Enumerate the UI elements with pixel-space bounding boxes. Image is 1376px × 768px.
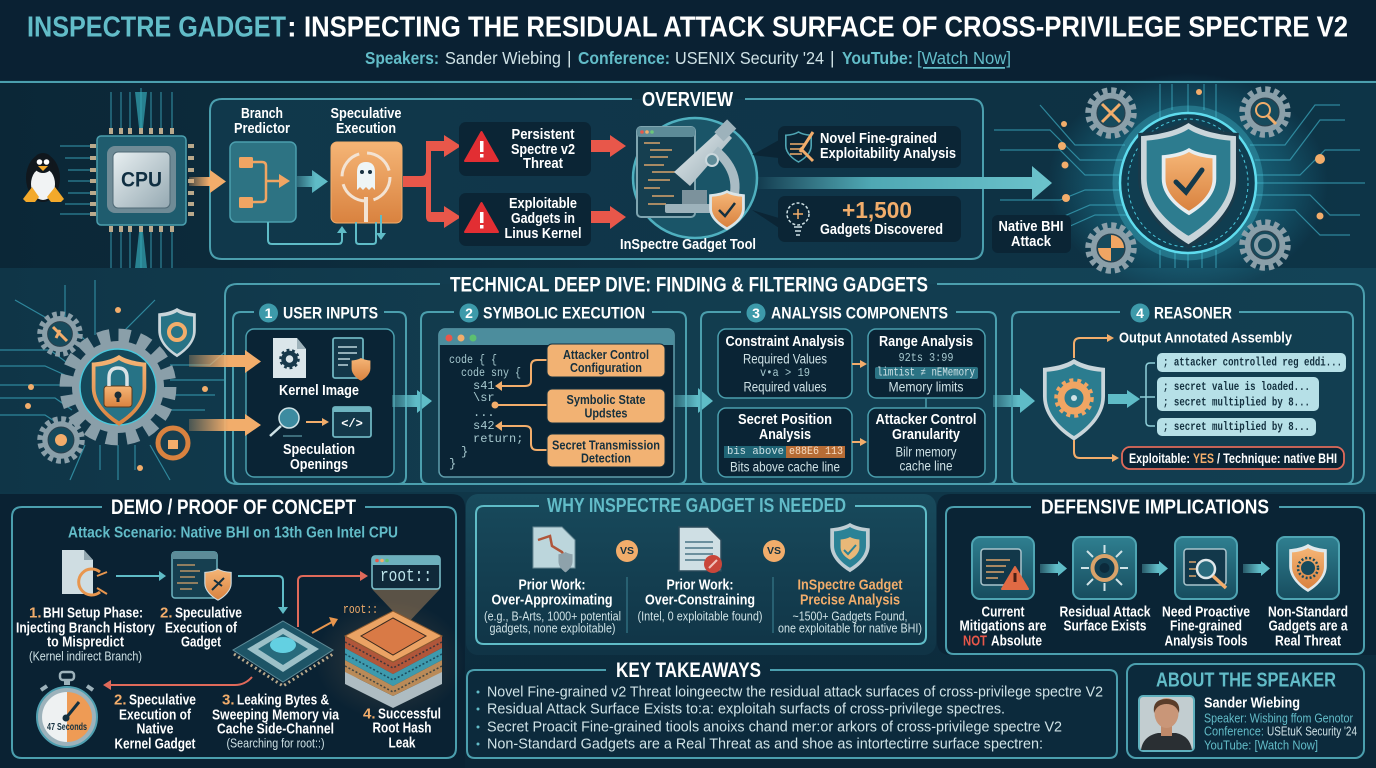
panel: technical deep dive (225, 274, 1364, 484)
callout: fine-grained analysis (752, 126, 961, 168)
card: attacker control granularity (868, 408, 985, 477)
label: proactive tools (1162, 604, 1250, 650)
badge: vs: VS (767, 545, 781, 557)
deep dive heading: TECHNICAL DEEP DIVE: FINDING & FILTERING GADGETS (450, 274, 928, 296)
step 4 text: 4. (363, 706, 376, 722)
icon: warning (465, 132, 498, 161)
step 1 text: to Mispredict (47, 634, 124, 650)
column: over-constraining (638, 576, 762, 624)
code window: code sny { (461, 366, 521, 380)
icon: over-approximating document (533, 527, 575, 572)
card: secret position analysis (718, 408, 852, 477)
big arrow: tool to defense (752, 166, 1052, 200)
step 2 text: Execution of (165, 620, 238, 636)
verdict: exploitable yes (1122, 447, 1344, 469)
label: current mitigations: Current (982, 604, 1025, 620)
panel: user inputs (233, 304, 406, 484)
card: secret position analysis: Bits above cache line (730, 460, 840, 474)
panel: user inputs: Kernel Image (279, 383, 359, 399)
badge: vs (616, 540, 638, 562)
branch predictor: Branch (241, 106, 283, 122)
speculative execution: Execution (336, 121, 396, 137)
card: secret position analysis: bis above (727, 446, 784, 458)
column: over-constraining: Prior Work: (666, 576, 734, 594)
icon: kernel image document (273, 338, 306, 378)
card: attacker control granularity: Bilr memory (896, 444, 957, 460)
panel: symbolic execution (421, 304, 686, 484)
icon: gadget window with shield (172, 552, 231, 600)
icon: cpu chip (60, 88, 194, 268)
code window: s42 (473, 419, 495, 433)
tag: symbolic state updates (547, 389, 665, 423)
badge: vs: VS (620, 545, 634, 557)
step badge 1: 1 (265, 305, 273, 321)
callout: gadgets discovered (752, 196, 961, 242)
tag: secret transmission detection: Secret Transmission (552, 438, 660, 452)
step 2 text: Gadget (181, 634, 221, 650)
icon: analysis tools (786, 132, 813, 162)
label: non-standard gadgets: Non-Standard (1268, 604, 1348, 620)
icon: gear ring (1243, 223, 1287, 267)
card: attacker control granularity: cache line (900, 458, 952, 474)
tag: symbolic state updates: Updstes (584, 406, 628, 420)
defensive heading: DEFENSIVE IMPLICATIONS (1041, 496, 1269, 518)
step 2 text: Speculative (175, 604, 242, 622)
about heading: ABOUT THE SPEAKER (1156, 670, 1336, 692)
callout: fine-grained analysis: Exploitability Analysis (820, 146, 956, 162)
verdict: exploitable yes: YES (1193, 450, 1214, 466)
step 3 text (212, 692, 340, 750)
code window: ... (473, 406, 495, 420)
column: over-approximating (484, 576, 621, 636)
arrow (1040, 561, 1067, 576)
card: constraint analysis (718, 329, 852, 398)
label: non-standard gadgets: Gadgets are a (1268, 618, 1348, 634)
card: range analysis: Range Analysis (879, 334, 973, 350)
step 2 native text: Execution of (119, 706, 192, 724)
code window: code { { (449, 353, 497, 367)
column: over-approximating: Over-Approximating (492, 592, 612, 608)
title: INSPECTRE GADGET (27, 12, 286, 44)
step 3 text: Leaking Bytes & (237, 692, 329, 708)
subtitle: speakers, conference, youtube: | (567, 48, 572, 68)
panel: symbolic execution: SYMBOLIC EXECUTION (483, 304, 645, 322)
step badge 3: 3 (752, 305, 760, 321)
icon: inspectre gadget tool: InSpectre Gadget Tool (620, 237, 756, 253)
column: precise analysis: one exploitable for native BHI) (778, 620, 922, 636)
native bhi attack label: Attack (1011, 234, 1052, 250)
tag: attacker control configuration (547, 344, 665, 377)
arrow (1142, 561, 1168, 576)
lines from chip (103, 571, 368, 690)
why heading: WHY INSPECTRE GADGET IS NEEDED (547, 495, 846, 517)
step 1 text: (Kernel indirect Branch) (29, 648, 142, 664)
lock gear illustration (0, 280, 225, 480)
speaker details: Conference: (1204, 724, 1264, 738)
bracket (1140, 363, 1155, 426)
label: proactive tools: Fine-grained (1170, 618, 1242, 634)
label: proactive tools: Need Proactive (1162, 604, 1250, 620)
panel: overview (210, 89, 1052, 259)
label: current mitigations: Absolute (991, 632, 1042, 650)
code window: } (461, 445, 468, 459)
tag: secret transmission detection (547, 434, 665, 467)
annotated assembly snippets: ; secret multiplied by 8... (1163, 420, 1310, 434)
label: residual attack surface: Residual Attack (1060, 604, 1151, 620)
takeaway bullets (476, 684, 1103, 752)
code window: s41 (473, 379, 495, 393)
speaker photo (1139, 696, 1194, 751)
native bhi attack label (992, 215, 1071, 253)
threat: persistent spectre v2: Threat (523, 156, 563, 172)
step badge 3 (746, 304, 766, 322)
subtitle: speakers, conference, youtube: YouTube: (842, 48, 913, 68)
threat: persistent spectre v2: Persistent (512, 127, 575, 143)
step 2 native text: Native (136, 720, 174, 738)
label: current mitigations (960, 604, 1046, 650)
step 4 text: Leak (388, 734, 416, 752)
tag: secret transmission detection: Detection (581, 450, 631, 466)
panel: user inputs: USER INPUTS (283, 304, 378, 322)
column: over-approximating: Prior Work: (518, 576, 586, 594)
line: gadget to chip (238, 576, 288, 614)
panel: key takeaways (467, 659, 1117, 758)
connectors (492, 360, 547, 450)
column: over-constraining: Over-Constraining (645, 592, 755, 608)
card: constraint analysis: v•a > 19 (760, 366, 810, 380)
arrow: cpu to overview (189, 170, 226, 193)
verdict: exploitable yes: Exploitable: (1129, 450, 1190, 466)
attack scenario subtitle: Attack Scenario: Native BHI on 13th Gen Intel CPU (68, 524, 398, 542)
icon: shield (158, 308, 196, 357)
column: precise analysis: Precise Analysis (800, 592, 900, 608)
takeaway bullets: Residual Attack Surface Exists to:a: exploitah surfacts of cross-privilege spectres. (487, 700, 1005, 718)
red split arrows (403, 135, 461, 228)
card: secret position analysis: Analysis (759, 427, 811, 443)
card: secret position analysis: e88E6 113 (789, 446, 843, 458)
code window: } (449, 457, 456, 471)
panel: user inputs: Speculation (283, 442, 355, 458)
step 4 text (363, 706, 441, 752)
subtitle: speakers, conference, youtube: Sander Wiebing (445, 48, 561, 68)
card: range analysis: limtist ≠ nEMemory (877, 366, 975, 380)
arrow: persistent threat to tool (591, 135, 626, 157)
icon: orange gear (158, 428, 188, 458)
icon: cpu chip: CPU (121, 168, 162, 192)
arrow: symbolic execution to analysis (674, 388, 713, 413)
threat: persistent spectre v2 (459, 122, 591, 176)
verdict: exploitable yes: / Technique: native BHI (1217, 450, 1337, 466)
root label: root:: (343, 603, 378, 617)
label: residual attack surface (1060, 604, 1151, 634)
column: precise analysis: InSpectre Gadget (798, 576, 902, 594)
tag: attacker control configuration: Configuration (570, 360, 642, 375)
step 4 text: Successful (378, 706, 441, 722)
speaker details (1204, 694, 1357, 752)
panel: reasoner (1012, 304, 1353, 484)
code window: return; (473, 432, 523, 446)
speaker details: Sander Wiebing (1204, 694, 1300, 712)
branch predictor (230, 106, 347, 244)
demo heading: DEMO / PROOF OF CONCEPT (111, 496, 356, 519)
subtitle: speakers, conference, youtube: Speakers: (365, 48, 439, 68)
icon: memory stack (345, 611, 442, 708)
takeaway bullets: Novel Fine-grained v2 Threat loingeectw the residual attack surfaces of cross-privilege spectre V2 (487, 684, 1103, 700)
step 3 text: (Searching for root::) (226, 736, 324, 750)
takeaway bullets: Non-Standard Gadgets are a Real Threat as and shoe as intortectirre surface spectren: (487, 736, 1043, 752)
column: over-approximating: (e.g., B-Arts, 1000+ potential (484, 608, 621, 624)
threat: persistent spectre v2: Spectre v2 (511, 142, 575, 158)
step badge 4: 4 (1136, 305, 1144, 321)
icon: chip (233, 621, 333, 686)
label: proactive tools: Analysis Tools (1164, 632, 1248, 650)
icon: magnifier to code window: </> (341, 417, 363, 431)
card: range analysis: Memory limits (888, 380, 964, 394)
arrow: setup to execution (116, 571, 166, 581)
arrow: shield to code (1108, 390, 1140, 408)
step 3 text: Cache Side-Channel (217, 720, 334, 738)
panel: analysis components (701, 304, 996, 484)
overview heading: OVERVIEW (642, 89, 733, 111)
icon: bhi setup document (62, 550, 107, 595)
speculative execution (330, 106, 402, 244)
step badge 2: 2 (465, 305, 473, 321)
annotated assembly snippets: ; secret value is loaded... (1163, 380, 1310, 394)
panel: demo / proof of concept (0, 494, 465, 768)
subtitle: speakers, conference, youtube: | (830, 48, 835, 68)
step 2 native text: Speculative (129, 692, 196, 708)
defense shield illustration (992, 73, 1365, 293)
connectors between cards (852, 360, 926, 446)
label: non-standard gadgets: Real Threat (1275, 632, 1341, 650)
annotated assembly snippets: ; secret multiplied by 8... (1163, 396, 1310, 410)
arrow: gear to kernel image (189, 350, 261, 373)
step 3 text: Sweeping Memory via (212, 706, 340, 724)
arrow (1243, 561, 1270, 576)
threat: exploitable gadgets: Exploitable (509, 196, 577, 212)
panel: why inspectre gadget is needed (466, 494, 936, 655)
linux penguin icon (23, 153, 64, 202)
callout: fine-grained analysis: Novel Fine-grained (820, 131, 937, 147)
tile: fine-grained tools (1175, 537, 1237, 599)
callout: gadgets discovered: +1,500 (842, 197, 912, 223)
branch predictor: Predictor (234, 121, 290, 137)
icon: gear with thumb (41, 420, 81, 460)
tag: symbolic state updates: Symbolic State (566, 392, 646, 407)
icon: warning (465, 203, 498, 232)
panel: analysis components: ANALYSIS COMPONENTS (771, 304, 948, 322)
tag: attacker control configuration: Attacker Control (563, 347, 649, 362)
subtitle: speakers, conference, youtube: [Watch Now] (917, 48, 1011, 68)
label: current mitigations: NOT (963, 632, 987, 650)
icon: gear (41, 315, 79, 353)
takeaway bullets: Secret Proacit Fine-grained tiools anoixs chand mer:or arkors of cross-privilege spectre V2 (487, 718, 1062, 736)
panel: reasoner: Output Annotated Assembly (1119, 330, 1293, 346)
panel: about the speaker (1127, 664, 1364, 758)
tile: non-standard gadgets (1277, 537, 1339, 599)
subtitle: speakers, conference, youtube (365, 48, 1011, 68)
threat: exploitable gadgets: Linus Kernel (504, 226, 582, 242)
subtitle: speakers, conference, youtube: Conference: (578, 48, 670, 68)
speculative execution: Speculative (330, 106, 402, 122)
panel: user inputs: Openings (290, 457, 348, 473)
title: : (287, 12, 297, 44)
icon: terminal root: root:: (380, 567, 432, 587)
code window: \sr (473, 391, 495, 405)
step 3 text: 3. (222, 692, 235, 708)
connector to verdict (1074, 440, 1119, 462)
label: non-standard gadgets (1268, 604, 1348, 650)
speaker details: YouTube: [Watch Now] (1204, 738, 1318, 752)
code window (439, 329, 674, 477)
icon: light bulb (787, 203, 809, 235)
arrow: inputs to symbolic execution (392, 390, 432, 413)
step badge 4 (1130, 304, 1150, 322)
step 1 text: BHI Setup Phase: (43, 604, 143, 622)
card: constraint analysis: Constraint Analysis (726, 334, 844, 350)
card: constraint analysis: Required Values (743, 352, 827, 366)
icon: reasoner shield (1043, 359, 1105, 441)
connector to output annotated assembly (1074, 334, 1114, 358)
icon: precise analysis shield (830, 523, 870, 572)
step 2 native text (114, 692, 196, 752)
callout: gadgets discovered: Gadgets Discovered (820, 222, 943, 238)
column: over-constraining: (Intel, 0 exploitable found) (638, 608, 762, 624)
column: precise analysis: ~1500+ Gadgets Found, (792, 608, 908, 624)
step badge 1 (259, 304, 278, 322)
step 2 native text: Kernel Gadget (114, 736, 196, 752)
card: secret position analysis: Secret Position (738, 412, 832, 428)
panel: reasoner: REASONER (1154, 304, 1232, 322)
divider (627, 577, 773, 633)
arrow: analysis to reasoner (993, 388, 1035, 413)
arrow: predictor to speculative execution (297, 170, 328, 193)
icon: terminal root (372, 556, 440, 589)
card: range analysis: 92ts 3:99 (898, 351, 954, 365)
tile: residual attack surface (1073, 537, 1136, 599)
icon: over-constraining document (679, 527, 722, 573)
column: precise analysis (778, 576, 922, 636)
threat: exploitable gadgets (459, 193, 591, 246)
tile: mitigations (972, 537, 1034, 599)
icon: document with shield (333, 338, 370, 381)
step 2 text (160, 604, 242, 650)
step 4 text: Root Hash (372, 720, 432, 736)
step 1 text: 1. (29, 604, 42, 622)
badge: vs (763, 540, 785, 562)
card: constraint analysis: Required values (744, 380, 827, 394)
card: attacker control granularity: Granularity (892, 427, 960, 443)
label: current mitigations: Mitigations are (960, 618, 1046, 634)
icon: gear with quadrant (1089, 226, 1133, 270)
icon: magnifier to code window (270, 407, 371, 437)
step 1 text (16, 604, 156, 664)
leak beam and glow (315, 589, 465, 720)
step 2 text: 2. (160, 604, 173, 622)
key takeaways heading: KEY TAKEAWAYS (616, 659, 761, 682)
icon: gear with magnifier (1243, 90, 1287, 134)
card: attacker control granularity: Attacker Control (876, 412, 976, 428)
icon: gear with tools (1089, 91, 1133, 135)
card: range analysis (868, 329, 985, 398)
arrow: gear to speculation openings (189, 414, 261, 436)
step 1 text: Injecting Branch History (16, 620, 156, 636)
step badge 2 (460, 304, 478, 322)
column: over-approximating: gadgets, none exploitable) (490, 620, 616, 636)
label: residual attack surface: Surface Exists (1064, 618, 1146, 634)
threat: exploitable gadgets: Gadgets in (511, 211, 575, 227)
arrow: gadgets to tool (591, 206, 626, 229)
subtitle: speakers, conference, youtube: USENIX Security '24 (675, 48, 824, 68)
native bhi attack label: Native BHI (998, 219, 1064, 235)
step 2 native text: 2. (114, 692, 127, 708)
icon: inspectre gadget tool (620, 118, 757, 253)
panel: defensive implications (937, 494, 1376, 655)
icon: stopwatch: 47 Seconds (47, 721, 87, 733)
annotated assembly snippets (1157, 353, 1346, 436)
icon: stopwatch (37, 672, 97, 747)
